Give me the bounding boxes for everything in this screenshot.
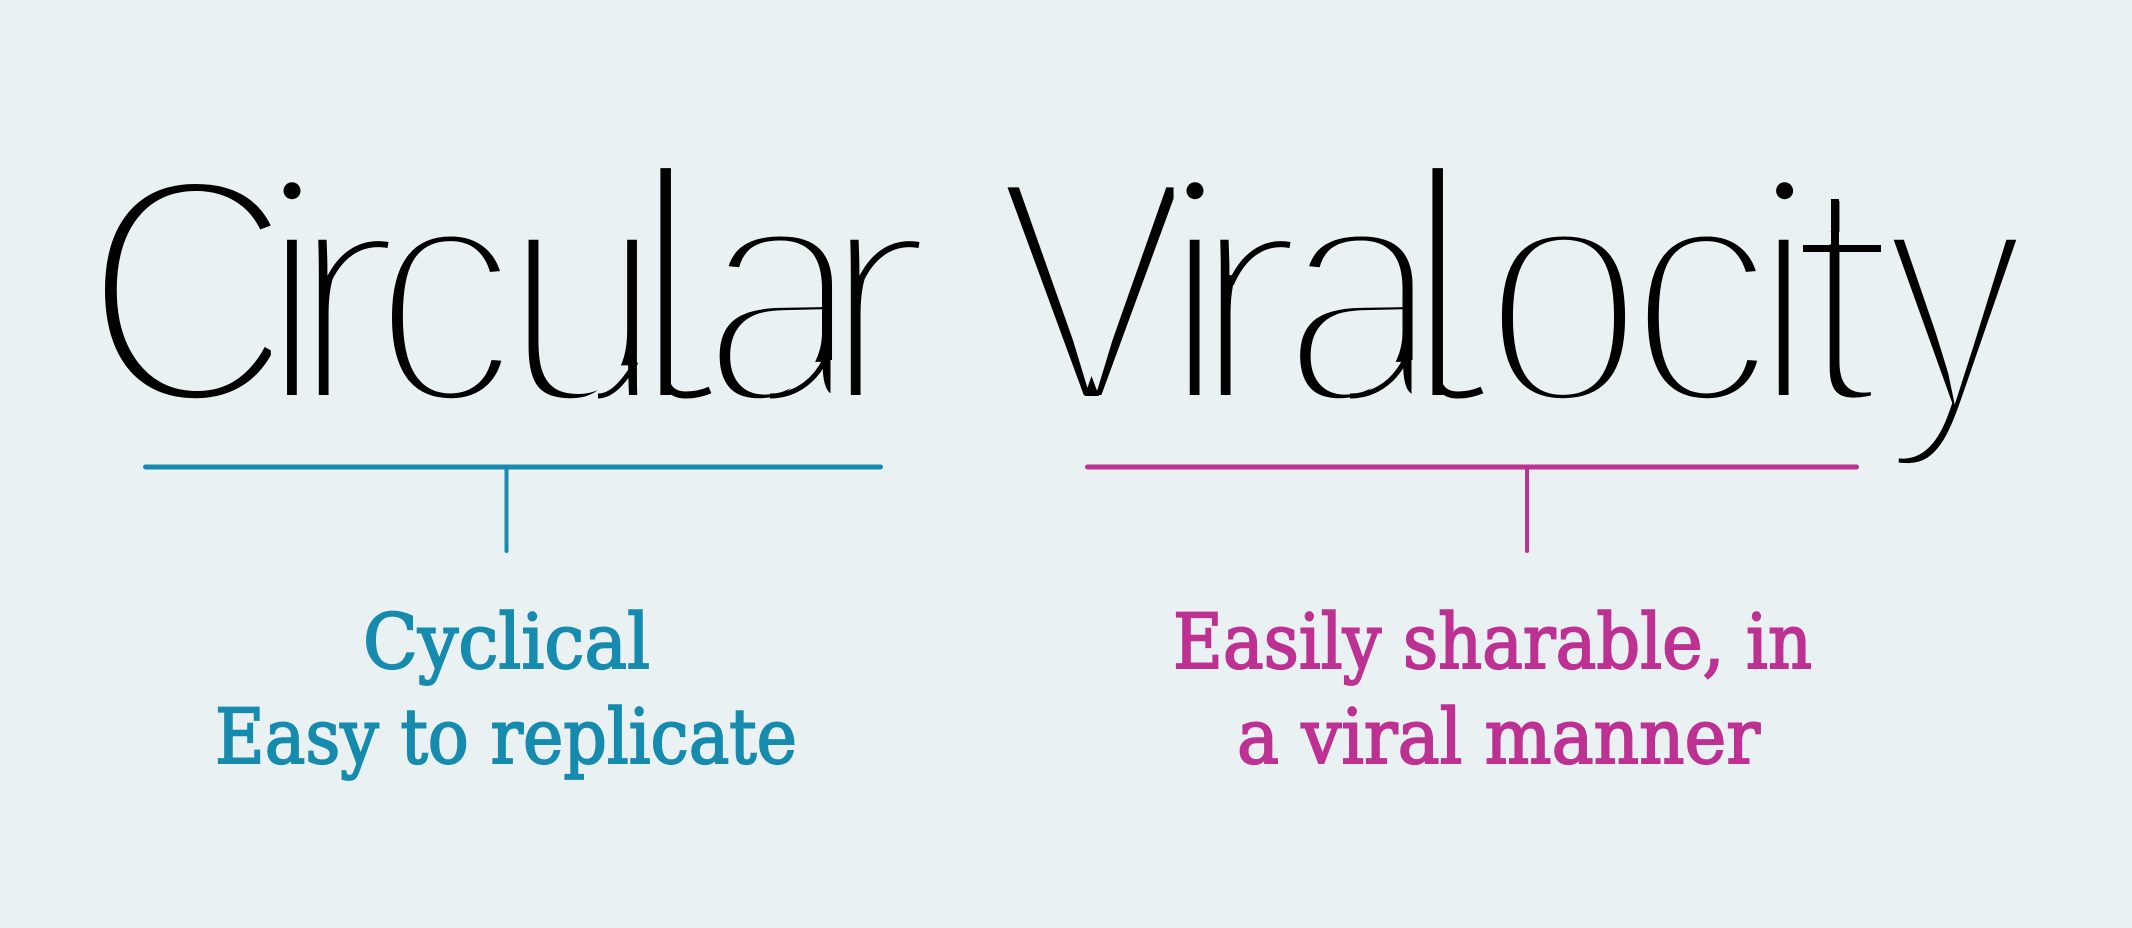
description: Circular: Cyclical [363, 597, 650, 686]
description: Circular [215, 597, 797, 781]
bracket: Viralocity [1085, 464, 1859, 553]
title: Viralocity: Viralocity [994, 98, 2029, 476]
description: Viralocity: Easily sharable, in [1173, 597, 1812, 686]
description: Viralocity [1173, 597, 1812, 781]
title: Circular: Circular [82, 98, 921, 476]
description: Circular: Easy to replicate [215, 692, 797, 781]
bracket: Circular [143, 464, 883, 553]
description: Viralocity: a viral manner [1237, 692, 1761, 781]
